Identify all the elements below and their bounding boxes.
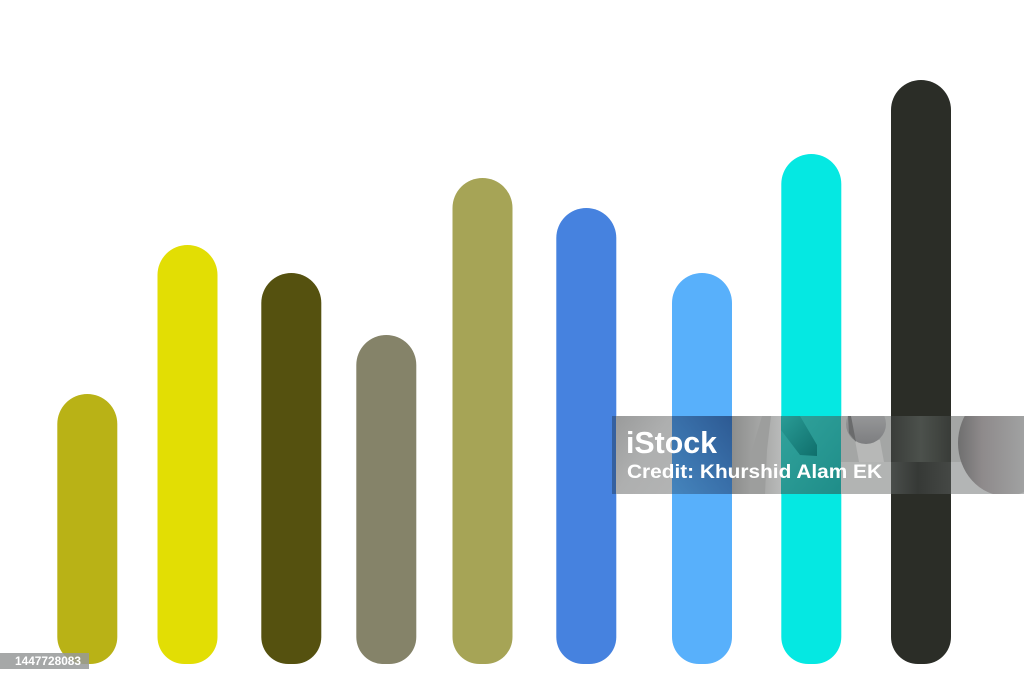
watermark credit: Credit: Khurshid Alam EK bbox=[627, 462, 882, 483]
bar 7: light blue bbox=[672, 273, 732, 664]
bar 6: blue bbox=[556, 208, 616, 664]
bar 5: khaki bbox=[452, 178, 512, 664]
bar 2: bright yellow bbox=[158, 245, 218, 664]
image id tag: 1447728083 bbox=[15, 654, 81, 668]
bar 3: dark olive bbox=[261, 273, 321, 664]
image id tag bbox=[0, 653, 89, 669]
bar 8: cyan bbox=[781, 154, 841, 664]
watermark band bbox=[612, 416, 1024, 494]
watermark logo: iStock bbox=[626, 425, 718, 460]
bar 9: near black bbox=[891, 80, 951, 664]
bar 1: olive yellow bbox=[57, 394, 117, 664]
bar 4: grey olive bbox=[356, 335, 416, 664]
